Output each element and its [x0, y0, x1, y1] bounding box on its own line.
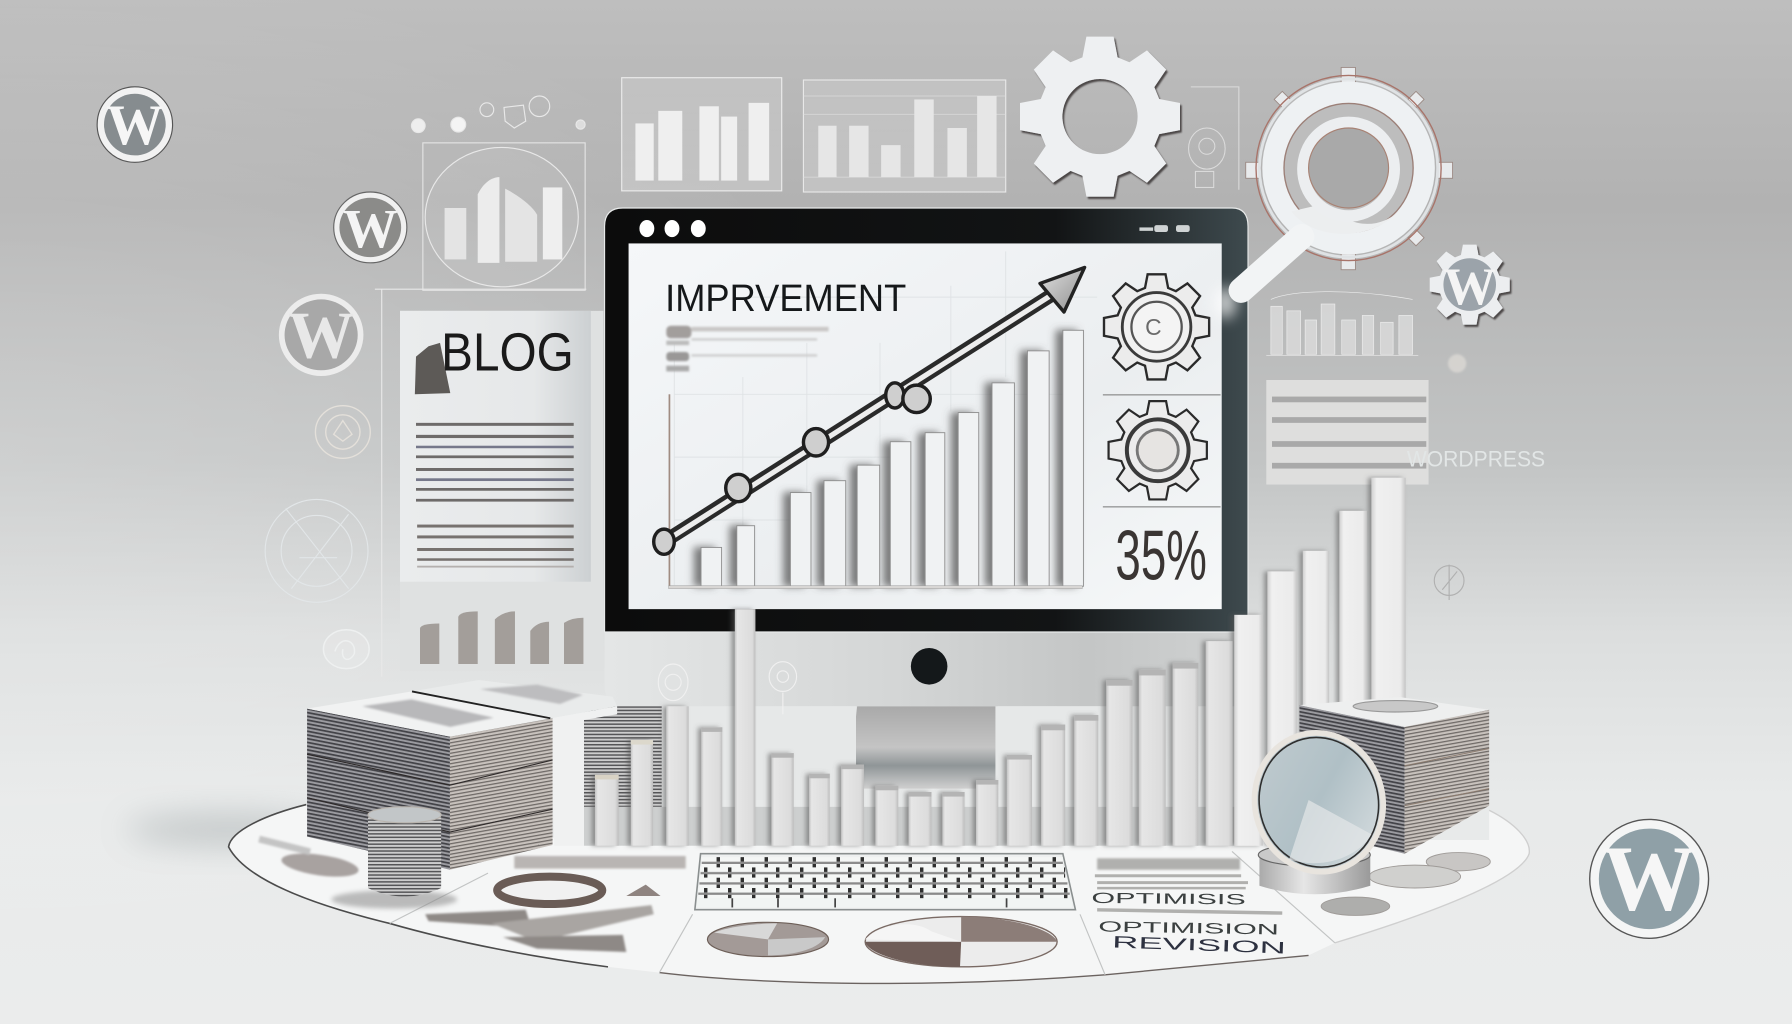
panel: left back stack of paper	[584, 706, 662, 807]
screen grid	[674, 251, 1097, 585]
window control dots	[639, 220, 706, 237]
trend arrow	[654, 267, 1085, 554]
screen	[629, 243, 1222, 609]
chart baseline	[669, 586, 1082, 589]
monitor bezel	[605, 208, 1248, 632]
label: optimisis: OPTIMISIS	[1091, 891, 1246, 908]
heading: BLOG: BLOG	[441, 322, 574, 382]
icon: faint drop badges on monitor chin	[658, 662, 797, 714]
mini bars at page foot	[420, 611, 583, 664]
icon: WordPress logo top left	[97, 87, 173, 162]
monitor stand	[848, 706, 1006, 789]
icon: faint spiral badge	[315, 406, 370, 458]
panel: right paper stack	[1299, 697, 1489, 854]
icon: faint target right	[1434, 565, 1464, 600]
label: optimision: OPTIMISION	[1098, 919, 1279, 939]
panel: keyboard	[695, 854, 1075, 910]
panel: floating bar chart one	[622, 78, 782, 191]
icon: faint outlined portrait	[1189, 87, 1239, 190]
panel: monitor	[605, 208, 1248, 706]
icon: faint swirl	[323, 630, 369, 669]
chart y axis	[669, 394, 670, 586]
stat: 35 percent: 35%	[1115, 516, 1207, 595]
pie chart large	[865, 917, 1057, 967]
document lines	[1095, 858, 1282, 915]
chart bars	[701, 330, 1083, 586]
smudged text strip	[514, 856, 686, 869]
blurred legend	[666, 326, 829, 371]
icon: WordPress logo bottom right	[1590, 819, 1709, 938]
icon: gear one	[1104, 274, 1209, 379]
icon: WordPress logo small: W	[343, 198, 398, 259]
panel: left paper stack	[307, 680, 617, 870]
light backdrop behind floor bars	[688, 706, 1101, 800]
text lines: second paragraph	[417, 525, 574, 568]
panel: outlined bar icon in ellipse	[423, 143, 585, 290]
heading: improvement: IMPRVEMENT	[665, 277, 906, 319]
icon: WordPress logo small	[334, 192, 407, 263]
blurred diagram text	[425, 905, 654, 952]
bar chart: rising silver bars	[595, 609, 1233, 846]
icon: gear two	[1109, 401, 1207, 499]
panel: text lines document	[1266, 380, 1429, 485]
icon: WordPress gear badge	[1430, 245, 1510, 325]
panel: blog page	[400, 311, 603, 671]
icon: striped cylinder	[331, 807, 457, 909]
icon: WordPress logo bottom right: W	[1602, 827, 1696, 931]
icon: faint compass wheel	[265, 499, 368, 602]
donut	[497, 877, 602, 904]
icon: blog thumbnail block	[415, 343, 450, 394]
icon: WordPress gear badge: W	[1443, 258, 1496, 316]
icon: large gear	[1020, 37, 1180, 197]
decorative guide lines	[375, 289, 586, 677]
icon: gear one: C	[1145, 314, 1162, 340]
faint outlined bar chart	[1266, 292, 1418, 355]
sketch shapes left	[258, 836, 360, 881]
panel: table disc with papers	[229, 805, 1529, 983]
panel: floating bar chart two	[803, 80, 1006, 192]
icon: magnifier with gear ring	[1241, 67, 1453, 290]
divider	[1103, 395, 1221, 507]
icon: WordPress logo top left: W	[106, 94, 163, 157]
monitor chin	[605, 617, 1248, 706]
label: revision: REVISION	[1112, 932, 1286, 957]
camera dot	[911, 648, 947, 685]
white paper band	[550, 706, 617, 846]
bar caps	[595, 663, 1198, 797]
sketch plates right	[1321, 853, 1490, 915]
pie chart small	[707, 922, 829, 957]
faint particles	[1448, 354, 1466, 373]
toolbar glyphs	[1139, 225, 1190, 232]
icon: magnifying glass on desk	[1240, 719, 1398, 894]
magnifier handle	[1241, 237, 1302, 290]
icon: WordPress logo medium: W	[288, 300, 354, 373]
icon: small floating dots and doodles	[411, 96, 585, 133]
label: WordPress: WORDPRESS	[1407, 446, 1545, 471]
text lines: first paragraph	[416, 423, 574, 502]
screen edge glow	[1214, 287, 1237, 319]
icon: WordPress logo medium	[279, 294, 363, 376]
bar chart: back silver bars	[1234, 478, 1406, 846]
floor band	[584, 807, 1235, 846]
floor shadow	[126, 815, 331, 845]
